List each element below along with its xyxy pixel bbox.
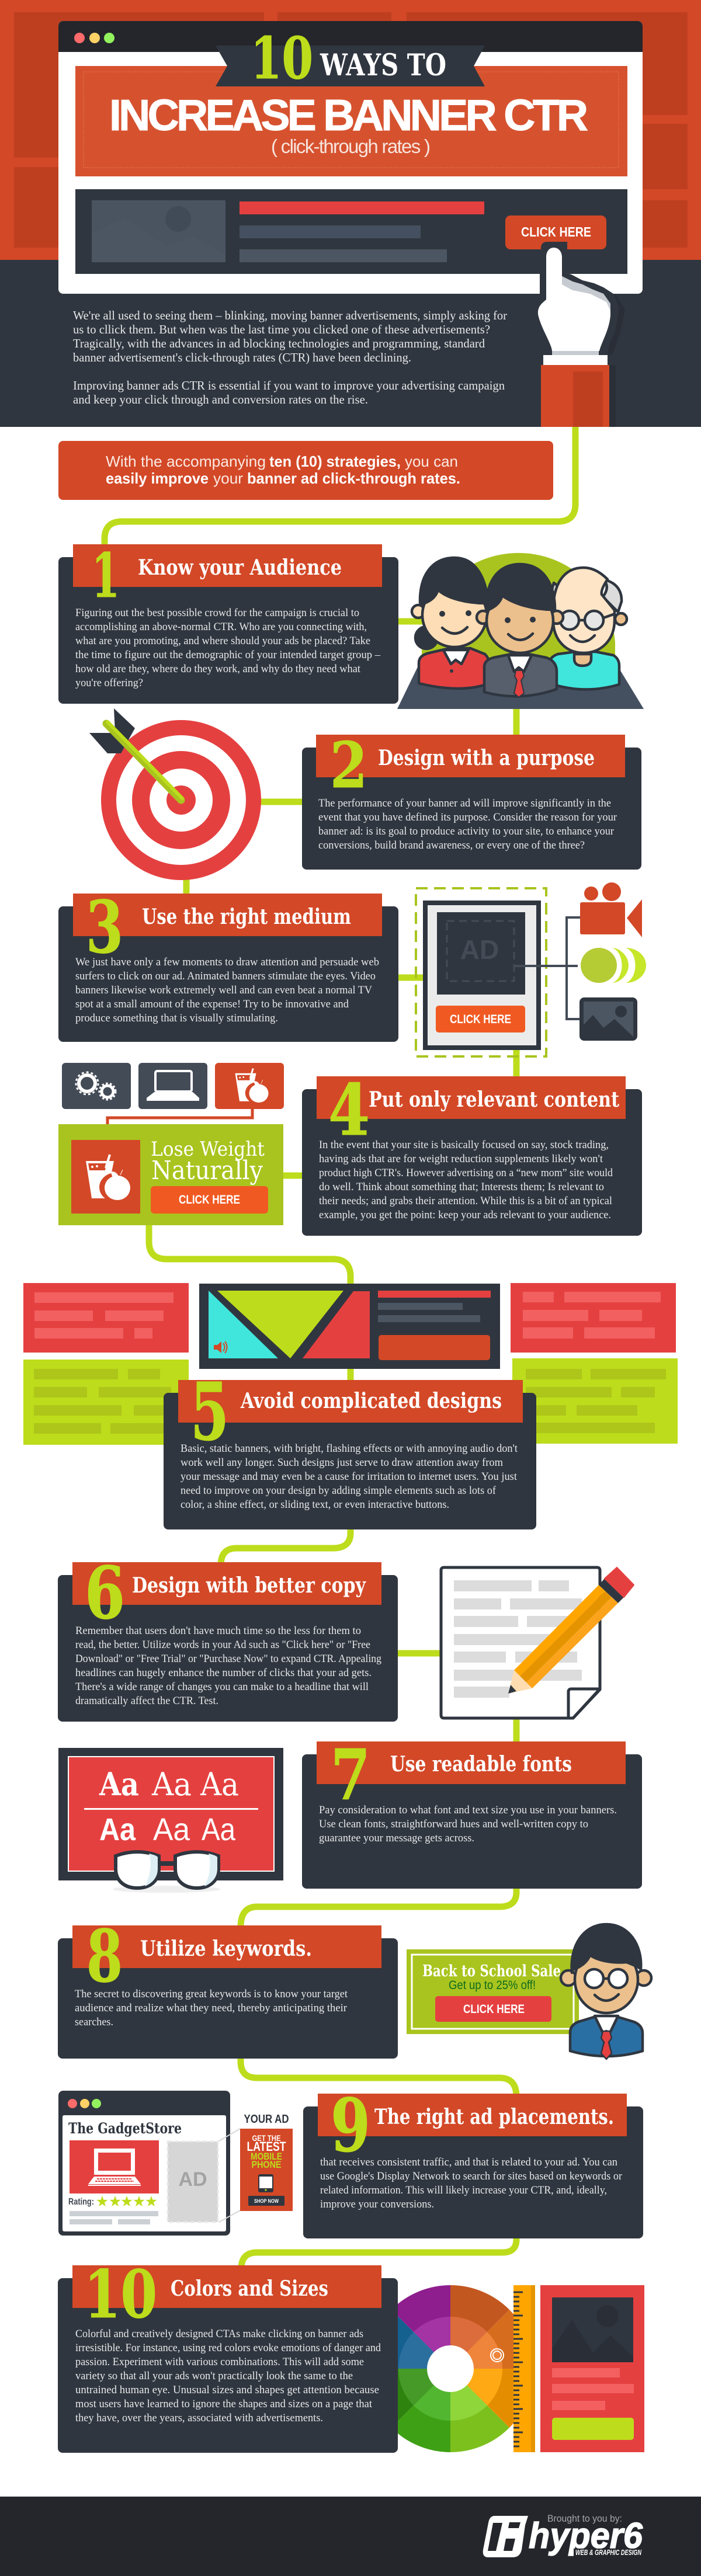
panel: step 10: they have, over the years, associated with advertisements. xyxy=(75,2412,323,2424)
sample ad: your ad: YOUR AD xyxy=(244,2113,289,2126)
panel: step 3: banners likewise work extremely well and can even beat a normal TV xyxy=(75,984,372,996)
intro text: We're all used to seeing them – blinking, moving banner advertisements, simply asking for xyxy=(73,308,507,322)
illustration: boy with glasses xyxy=(561,1924,651,2059)
panel: step 6: Remember that users don't have much time so the less for them to xyxy=(75,1625,361,1637)
illustration: web page with ad slot: Rating: xyxy=(68,2197,94,2207)
illustration: ad formats: AD xyxy=(460,934,499,965)
panel: step 6: Download" or "Free Trial" or "Purchase Now" to expand CTR. Appealing xyxy=(75,1653,381,1665)
sample ad: your ad: LATEST xyxy=(247,2139,286,2154)
panel: step 2: The performance of your banner ad will improve significantly in the xyxy=(318,797,611,809)
sample ad: tall banner xyxy=(540,2285,644,2452)
illustration: audience xyxy=(397,553,644,709)
browser window xyxy=(58,21,643,294)
illustration: web page with ad slot: AD xyxy=(178,2168,207,2191)
illustration: web page with ad slot xyxy=(58,2091,240,2236)
icon: pointing hand with sleeve xyxy=(538,242,625,427)
panel: step 2: Design with a purpose xyxy=(378,746,595,770)
panel: step 1: you're offering? xyxy=(75,677,143,689)
title banner: WAYS TO xyxy=(320,48,446,83)
panel: step 9: improve your conversions. xyxy=(320,2198,434,2210)
panel: step 5 xyxy=(164,1365,536,1529)
callout: With the accompanying xyxy=(106,453,266,470)
panel: step 1 xyxy=(58,540,398,704)
panel: step 7 xyxy=(302,1734,642,1889)
callout: easily improve xyxy=(106,470,209,487)
illustration: ruler xyxy=(513,2285,535,2452)
intro text: Improving banner ads CTR is essential if you want to improve your advertising campaign xyxy=(73,378,505,392)
panel: step 10 xyxy=(58,2257,398,2453)
sample ad: lose weight xyxy=(58,1124,283,1225)
panel: step 3 xyxy=(58,886,398,1042)
panel: step 5: your message and may even be a cause for irritation to internet users. You just xyxy=(181,1470,518,1483)
panel: step 1: the time to figure out the demographic of your intended target group – xyxy=(75,649,380,661)
panel: step 4: In the event that your site is basically focused on say, stock trading, xyxy=(319,1139,609,1151)
panel: step 8: audience and realize what they need, thereby anticipating their xyxy=(75,2002,348,2014)
panel: step 10: untrained human eye. Unusual sizes and shapes get attention because xyxy=(75,2384,379,2396)
callout: you can xyxy=(405,453,458,470)
illustration: complicated banners xyxy=(23,1283,678,1445)
panel: step 9: that receives consistent traffic, and that is related to your ad. You can xyxy=(320,2156,617,2168)
panel: step 3: produce something that is visually stimulating. xyxy=(75,1012,278,1024)
illustration: readable fonts: Aa xyxy=(202,1812,236,1847)
panel: step 3: Use the right medium xyxy=(142,905,351,929)
sample ad: back to school: Get up to 25% off! xyxy=(449,1979,536,1992)
panel: step 1: Figuring out the best possible crowd for the campaign is crucial to xyxy=(75,607,359,619)
hero background with panels xyxy=(0,0,701,427)
sample ad: your ad: GET THE xyxy=(252,2133,280,2143)
sample ad: back to school xyxy=(407,1949,579,2034)
illustration: readable fonts: Aa xyxy=(99,1812,136,1847)
panel: step 1: accomplishing an above-normal CTR. Who are you connecting with, xyxy=(75,621,367,633)
sample ad: your ad xyxy=(240,2113,293,2211)
panel: step 10: Colorful and creatively designed CTAs make clicking on banner ads xyxy=(75,2328,363,2340)
panel: step 10: 10 xyxy=(84,2257,157,2333)
illustration: ad formats: CLICK HERE xyxy=(450,1013,511,1026)
callout: ten (10) strategies, xyxy=(269,453,401,470)
panel: step 6: headlines can hugely enhance the number of clicks that your ad gets. xyxy=(75,1667,372,1679)
illustration: readable fonts: Aa xyxy=(153,1812,190,1847)
illustration: readable fonts: Aa xyxy=(99,1765,139,1803)
panel: step 5: need to improve on your design by adding simple elements such as lots of xyxy=(181,1485,497,1497)
panel: step 2: event that you have defined its purpose. Consider the reason for your xyxy=(318,811,617,823)
panel: step 10: passion. Experiment with various combinations. This will add some xyxy=(75,2356,364,2368)
sample banner ad xyxy=(75,189,627,274)
sample ad: lose weight: Lose Weight xyxy=(151,1138,265,1161)
panel: step 10: Colors and Sizes xyxy=(171,2276,328,2301)
panel: step 2: 2 xyxy=(330,729,367,802)
panel: step 6: There's a wide range of changes you can make to a headline that will xyxy=(75,1681,369,1693)
panel: step 5: color, a shine effect, or sliding text, or even interactive buttons. xyxy=(181,1499,449,1511)
panel: step 9 xyxy=(303,2083,643,2238)
panel: step 6: read, the better. Utilize words in your Ad such as "Click here" or "Free xyxy=(75,1639,370,1651)
panel: step 4: their needs; and grabs their attention. While this is a bit of an typical xyxy=(319,1195,612,1207)
panel: step 4: Put only relevant content xyxy=(369,1087,619,1112)
sample ad: your ad: SHOP NOW xyxy=(254,2198,279,2204)
title banner: ( click-through rates ) xyxy=(271,135,431,157)
panel: step 9: The right ad placements. xyxy=(374,2105,614,2129)
illustration: ad formats xyxy=(416,882,646,1056)
illustration: readable fonts: Aa xyxy=(151,1766,192,1803)
panel: step 4: example, you get the point: keep your ads relevant to your audience. xyxy=(319,1209,611,1221)
icons row xyxy=(62,1063,284,1140)
intro text: us to cllick them. But when was the last time you clicked one of these advertisements? xyxy=(73,322,490,336)
panel: step 5: Basic, static banners, with bright, flashing effects or with annoying audio don't xyxy=(181,1442,518,1455)
illustration: web page with ad slot: The GadgetStore xyxy=(68,2120,182,2137)
sample ad: back to school: Back to School Sale xyxy=(422,1962,561,1980)
panel: step 7: guarantee your message gets across. xyxy=(319,1832,474,1844)
callout xyxy=(58,441,553,500)
panel: step 6: dramatically affect the CTR. Test. xyxy=(75,1695,218,1707)
icon: target with arrow xyxy=(89,708,261,880)
title banner xyxy=(75,25,627,176)
panel: step 2: conversions, build brand awareness, or every one of the three? xyxy=(318,839,585,851)
panel: step 1: how old are they, where do they work, and why do they need what xyxy=(75,663,361,675)
sample banner ad: CLICK HERE xyxy=(521,224,591,239)
panel: step 4: do well. Think about something that; Interests them; Is relevant to xyxy=(319,1181,604,1193)
footer: hyper6 xyxy=(529,2516,643,2556)
panel: step 1: Know your Audience xyxy=(138,555,342,580)
panel: step 7: Use readable fonts xyxy=(390,1752,572,1777)
panel: step 3: spot at a small amount of the expense! Try to be innovative and xyxy=(75,998,349,1010)
panel: step 7: 7 xyxy=(331,1734,370,1816)
panel: step 10: irresistible. For instance, using red colors evoke emotions of danger and xyxy=(75,2342,381,2354)
illustration: colour wheel xyxy=(367,2285,534,2452)
connector path xyxy=(105,427,575,2269)
panel: step 8: Utilize keywords. xyxy=(140,1937,312,1961)
panel: step 4: 4 xyxy=(328,1068,370,1152)
panel: step 3: surfers to click on our ad. Animated banners stimulate the eyes. Video xyxy=(75,970,376,982)
panel: step 1: 1 xyxy=(92,540,120,611)
panel: step 8: The secret to discovering great keywords is to know your target xyxy=(75,1988,348,2000)
sample ad: your ad: MOBILE xyxy=(251,2151,282,2162)
callout: banner ad click-through rates. xyxy=(247,470,460,487)
panel: step 6: 6 xyxy=(85,1552,125,1636)
panel: step 3: 3 xyxy=(86,886,123,970)
callout: your xyxy=(213,470,243,487)
panel: step 9: use Google's Display Network to search for sites based on keywords or xyxy=(320,2170,623,2182)
illustration: document and pencil xyxy=(441,1567,634,1718)
sample ad: lose weight: Naturally xyxy=(151,1156,263,1186)
panel: step 3: We just have only a few moments to draw attention and persuade web xyxy=(75,956,379,968)
panel: step 8: 8 xyxy=(86,1915,123,1999)
title banner: 10 xyxy=(251,25,313,92)
panel: step 5: 5 xyxy=(190,1365,229,1459)
panel: step 5: work well any longer. Such designs just serve to draw attention away from xyxy=(181,1456,503,1469)
sample ad: back to school: CLICK HERE xyxy=(463,2003,525,2016)
panel: step 6 xyxy=(58,1552,398,1722)
sample ad: lose weight: CLICK HERE xyxy=(179,1193,240,1207)
panel: step 8 xyxy=(58,1915,398,2059)
sample ad: your ad: PHONE xyxy=(251,2159,282,2170)
panel: step 9: 9 xyxy=(331,2083,370,2168)
panel: step 1: what are you promoting, and where should your ads be placed? Take xyxy=(75,635,370,647)
panel: step 4: product high CTR's. However advertising on a “new mom” site would xyxy=(319,1167,613,1179)
footer: Brought to you by: xyxy=(547,2513,622,2524)
panel: step 7: Use clean fonts, straightforward hues and well-written copy to xyxy=(319,1818,588,1830)
intro text: banner advertisement's click-through rates (CTR) have been declining. xyxy=(73,350,411,364)
intro text: Tragically, with the advances in ad blocking technologies and programming, standard xyxy=(73,336,485,350)
panel: step 2 xyxy=(302,729,641,870)
intro text xyxy=(73,308,507,406)
panel: step 5: Avoid complicated designs xyxy=(240,1389,502,1413)
panel: step 4 xyxy=(302,1068,642,1236)
title banner: INCREASE BANNER CTR xyxy=(109,91,588,140)
panel: step 7: Pay consideration to what font and text size you use in your banners. xyxy=(319,1804,617,1816)
panel: step 8: searches. xyxy=(75,2016,113,2028)
panel: step 4: having ads that are for weight reduction supplements likely won't xyxy=(319,1153,603,1165)
panel: step 6: Design with better copy xyxy=(132,1573,366,1598)
footer xyxy=(0,2497,701,2576)
panel: step 2: banner ad: is its goal to produce activity to your site, to enhance your xyxy=(318,825,615,837)
illustration: readable fonts xyxy=(58,1748,283,1893)
footer: WEB & GRAPHIC DESIGN xyxy=(575,2548,641,2557)
panel: step 10: variety so that all your ads won't practically look the same to the xyxy=(75,2370,353,2382)
intro text: and keep your click through and conversion rates on the rise. xyxy=(73,392,368,406)
panel: step 10: most users have learned to ignore the shapes and sizes on a page that xyxy=(75,2398,373,2410)
illustration: readable fonts: Aa xyxy=(200,1766,239,1803)
panel: step 9: related information. This will likely increase your CTR, and, ideally, xyxy=(320,2184,607,2196)
